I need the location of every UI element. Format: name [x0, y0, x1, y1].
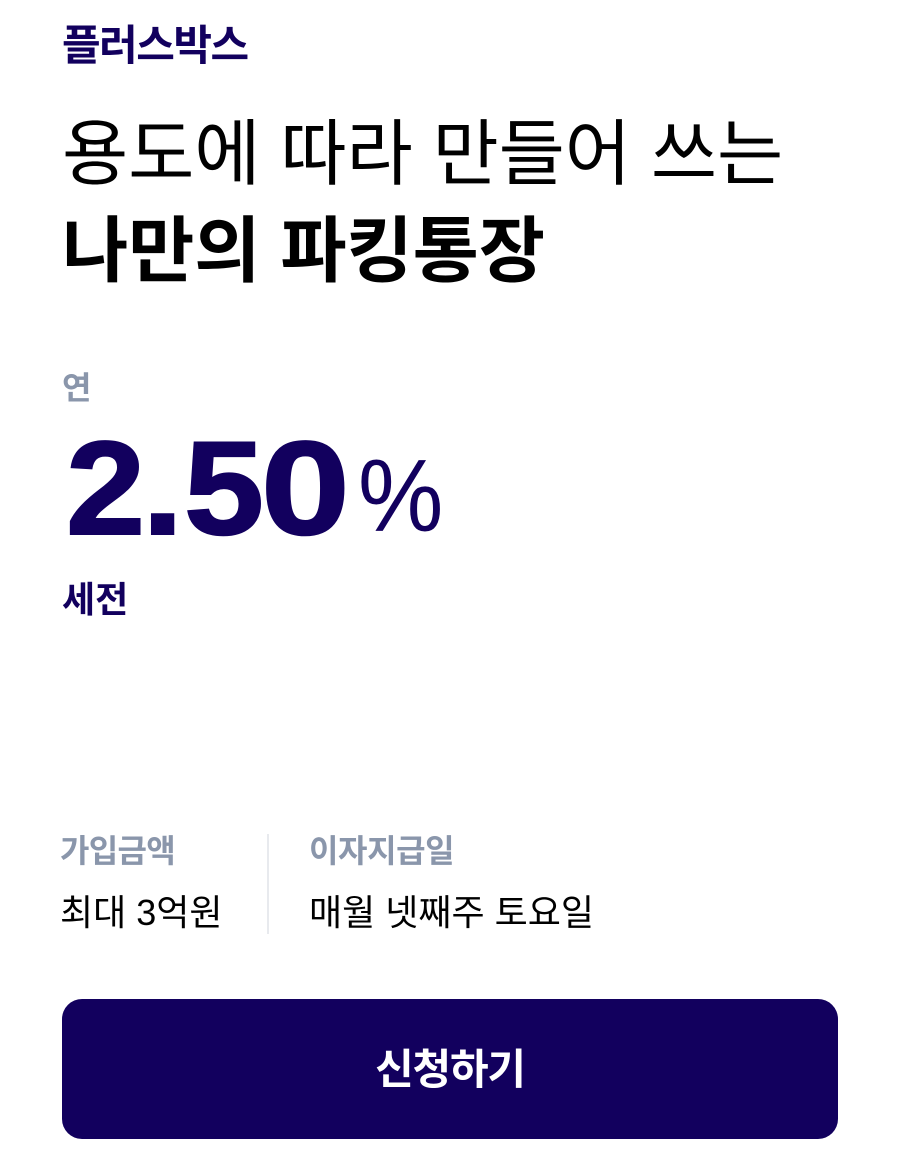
rate number: 2	[66, 415, 145, 563]
percent sign: %	[358, 439, 443, 553]
rate number	[66, 415, 350, 563]
rate number: 0	[261, 415, 350, 563]
rate number: 5	[184, 415, 264, 563]
detail: subscription amount	[60, 833, 223, 933]
apply button	[62, 999, 838, 1139]
amount value: 최대 3억원	[60, 892, 223, 933]
title	[62, 115, 783, 292]
detail: interest payment date	[309, 833, 594, 933]
title line 2: 나만의 파킹통장	[62, 212, 545, 292]
brand label: 플러스박스	[62, 22, 248, 69]
payment date value: 매월 넷째주 토요일	[309, 892, 594, 933]
rate number: .	[142, 415, 183, 563]
interest rate	[66, 415, 443, 563]
rate prefix: 연	[62, 370, 91, 406]
pre-tax label: 세전	[62, 579, 128, 620]
title line 1: 용도에 따라 만들어 쓰는	[62, 115, 783, 195]
apply button: 신청하기	[375, 1046, 525, 1092]
payment date label: 이자지급일	[309, 833, 454, 869]
amount label: 가입금액	[60, 833, 175, 869]
